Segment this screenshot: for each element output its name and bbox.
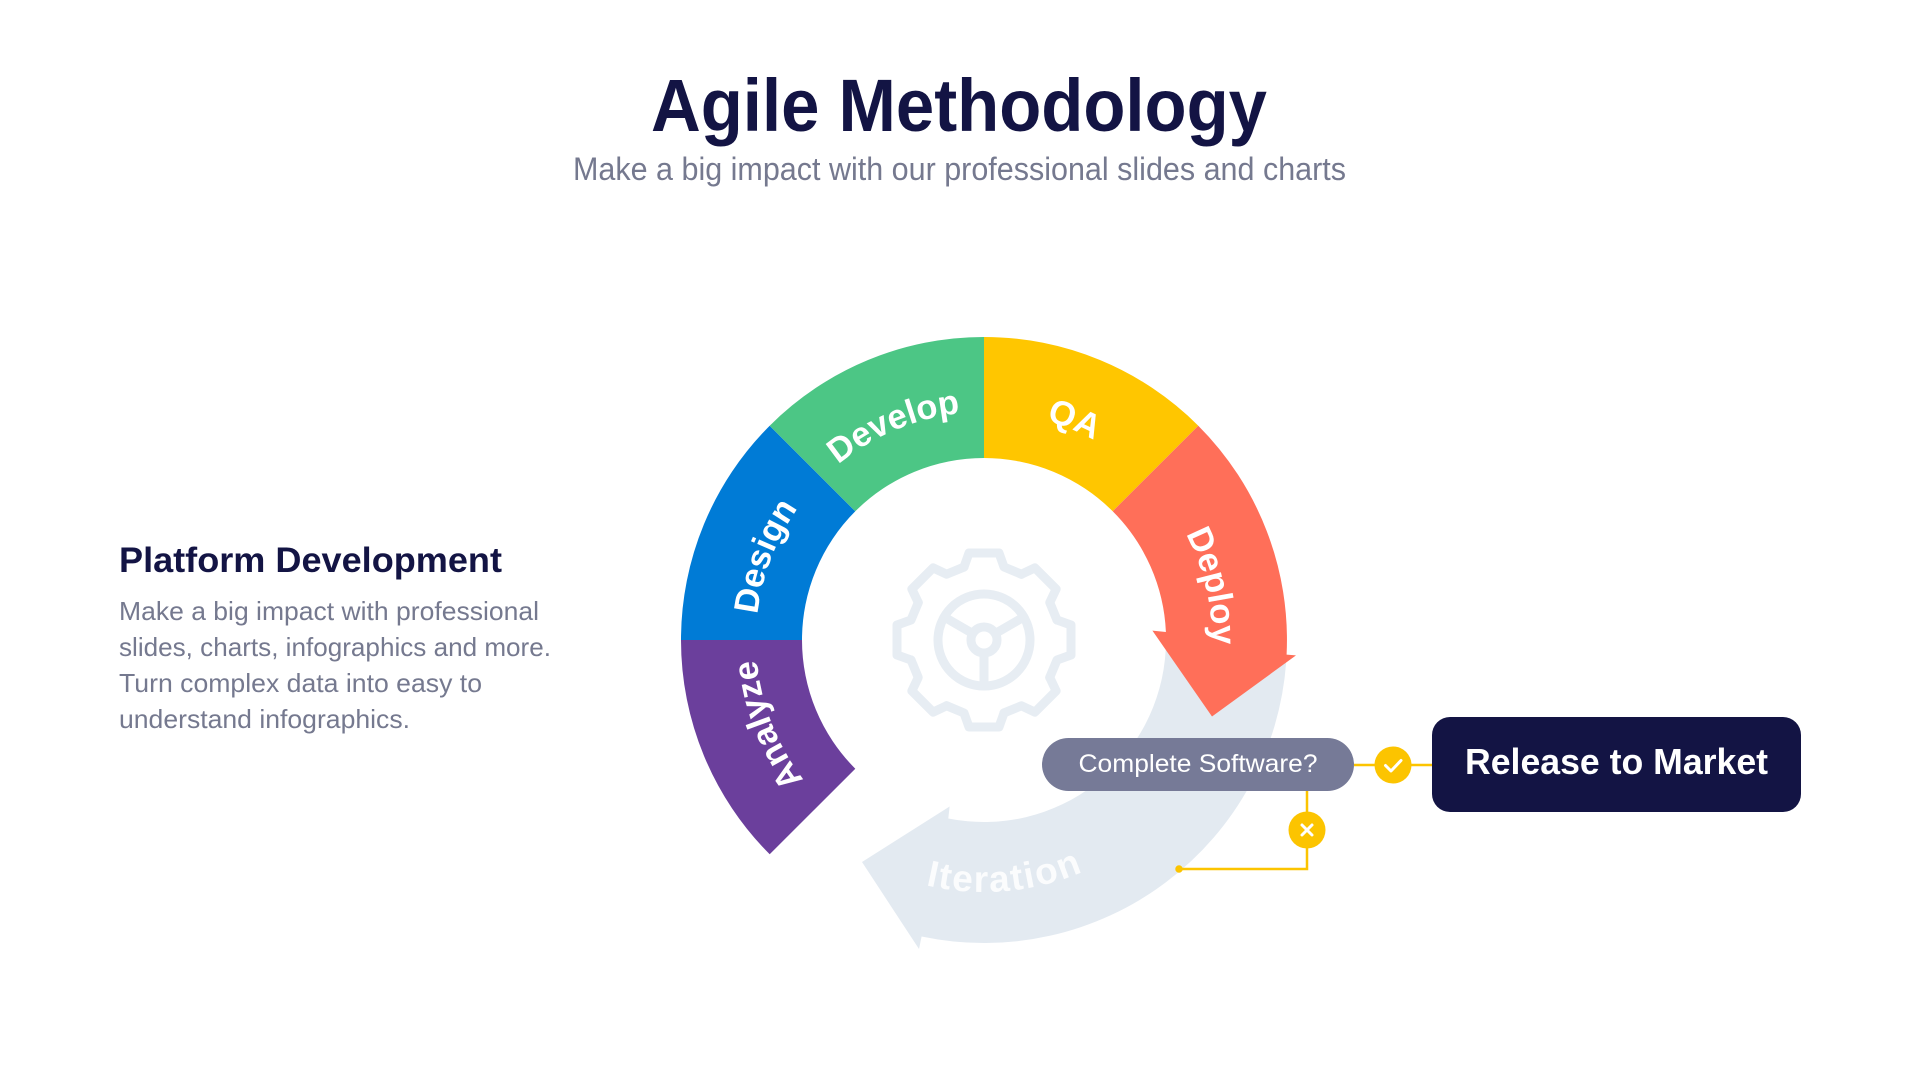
segment: analyze: Analyze [739,662,804,786]
icon: central gear with steering wheel [896,552,1072,728]
decision pill: complete software: Complete Software? [1078,750,1318,778]
text block: description [119,596,551,734]
arrow: iteration: Iteration [928,856,1080,892]
arrow: iteration [862,650,1286,949]
text block: description: Turn complex data into easy to [119,668,482,698]
segment: deploy arrow: Deploy [1187,526,1234,644]
text block: description: understand infographics. [119,704,410,734]
box: release to market: Release to Market [1465,741,1768,782]
heading: platform development: Platform Development [119,541,502,580]
segment: design: Design [734,502,797,612]
connector lines [1176,765,1432,872]
segment: develop: Develop [826,396,958,463]
decision pill: complete software [1042,738,1354,791]
title: Agile Methodology [651,64,1267,147]
panel: platform development text [119,541,551,734]
icon: yes check [1374,746,1412,784]
text block: description: slides, charts, infographics and more. [119,632,551,662]
subtitle: Make a big impact with our professional slides and charts [573,151,1346,187]
text block: description: Make a big impact with professional [119,596,539,626]
segment: qa: QA [1050,401,1096,440]
segment: develop [770,337,984,512]
icon: no cross [1288,812,1326,848]
segment: design [681,426,856,640]
segment: qa [984,337,1198,512]
segment: analyze [681,640,856,854]
segment: deploy arrow [1112,426,1296,716]
box: release to market [1432,717,1801,812]
